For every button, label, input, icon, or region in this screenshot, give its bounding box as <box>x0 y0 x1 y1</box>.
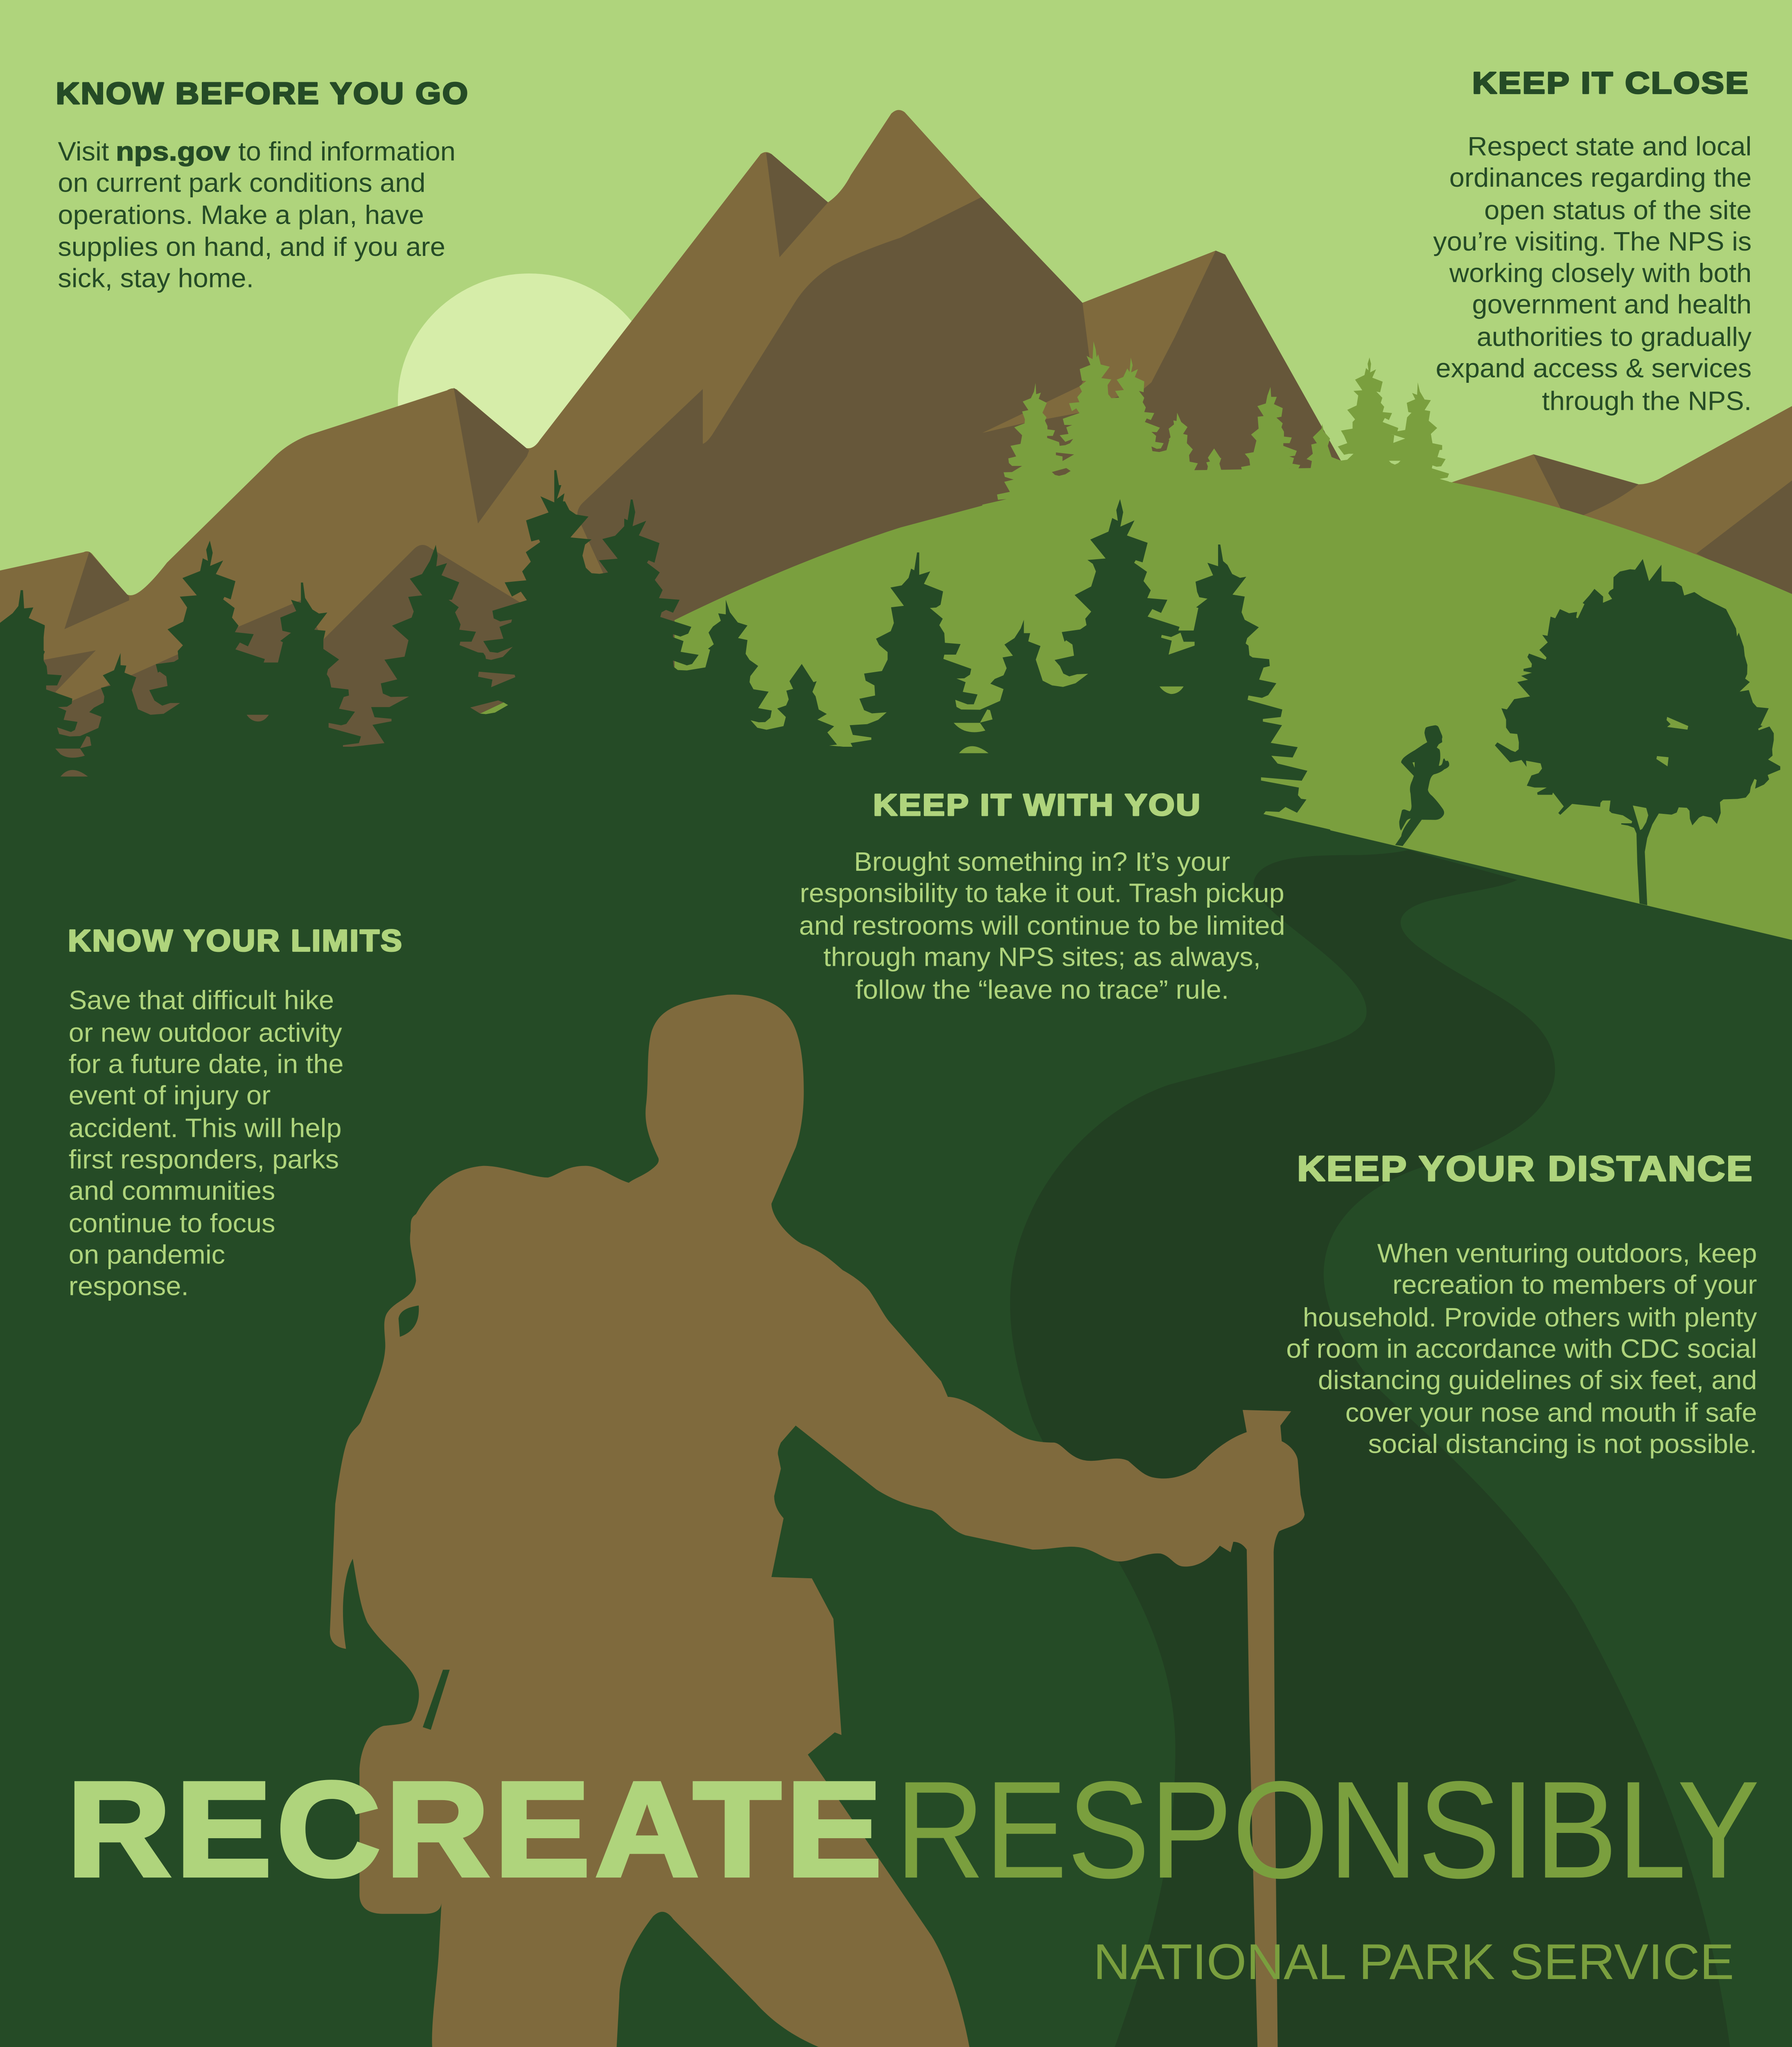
text: know before you go: on current park conditions and <box>58 168 426 198</box>
text: know your limits: event of injury or <box>69 1080 271 1110</box>
text: keep it close: through the NPS. <box>1542 386 1751 416</box>
heading: know your limits: KNOW YOUR LIMITS <box>68 924 403 958</box>
text: know before you go: to find information <box>238 136 456 166</box>
main mountain range <box>0 110 1341 836</box>
text: keep it with you: responsibility to take it out. Trash pickup <box>800 878 1284 908</box>
text: know your limits <box>69 985 344 1301</box>
text: keep your distance: When venturing outdoors, keep <box>1377 1238 1757 1268</box>
text: keep it with you <box>799 847 1285 1004</box>
text: keep it close <box>1433 131 1751 416</box>
text: keep it close: ordinances regarding the <box>1449 163 1751 192</box>
text: know before you go: Visit <box>58 136 109 166</box>
text: keep it close: you’re visiting. The NPS is <box>1433 226 1751 256</box>
text: know before you go: supplies on hand, and if you are <box>58 232 445 262</box>
heading: keep it close: KEEP IT CLOSE <box>1472 66 1749 100</box>
text: know your limits: first responders, parks <box>69 1144 339 1174</box>
text: keep it close: authorities to gradually <box>1477 322 1751 352</box>
hill <box>675 468 1792 966</box>
distant right mountains <box>1446 406 1792 614</box>
text: keep your distance: cover your nose and mouth if safe <box>1345 1398 1757 1427</box>
winding trail <box>1010 850 1730 2047</box>
text: know before you go: operations. Make a plan, have <box>58 200 424 230</box>
heading: know before you go: KNOW BEFORE YOU GO <box>56 77 469 110</box>
text: keep your distance: distancing guidelines of six feet, and <box>1318 1365 1757 1395</box>
text: know your limits: continue to focus <box>69 1208 275 1238</box>
text: know before you go <box>58 136 456 293</box>
heading: keep it with you: KEEP IT WITH YOU <box>873 788 1202 822</box>
text: keep it with you: and restrooms will continue to be limited <box>799 911 1285 940</box>
text: keep it close: Respect state and local <box>1467 131 1751 161</box>
text: keep it with you: through many NPS sites; as always, <box>824 942 1261 972</box>
text: know your limits: Save that difficult hike <box>69 985 334 1015</box>
hilltop trees <box>982 341 1474 516</box>
subtitle: national park service: NATIONAL PARK SERVICE <box>1093 1934 1734 1990</box>
hiker silhouette with trekking pole <box>330 994 1305 2047</box>
text: know your limits: response. <box>69 1271 189 1301</box>
text: keep it with you: follow the “leave no trace” rule. <box>855 974 1229 1004</box>
sun <box>398 273 660 528</box>
text: keep it close: government and health <box>1472 289 1751 319</box>
title: recreate: RECREATE <box>67 1754 887 1904</box>
text: keep your distance: social distancing is not possible. <box>1368 1429 1757 1459</box>
text: keep it close: expand access & services <box>1435 353 1751 383</box>
text: know before you go: sick, stay home. <box>58 263 254 293</box>
text: know your limits: for a future date, in the <box>69 1049 344 1079</box>
heading: keep your distance: KEEP YOUR DISTANCE <box>1297 1149 1754 1188</box>
text: know your limits: or new outdoor activity <box>69 1018 342 1047</box>
text: keep it with you: Brought something in? It’s your <box>854 847 1230 877</box>
text: keep your distance: household. Provide others with plenty <box>1303 1302 1757 1332</box>
text: know your limits: on pandemic <box>69 1240 225 1270</box>
text: keep your distance <box>1286 1238 1757 1459</box>
text: know before you go: nps.gov <box>116 136 230 166</box>
leafy tree <box>1495 559 1780 905</box>
text: keep your distance: of room in accordance with CDC social <box>1286 1333 1757 1363</box>
text: know your limits: and communities <box>69 1175 275 1205</box>
runner silhouette <box>1395 725 1449 846</box>
foreground ground and conifer tree line <box>0 470 1792 2047</box>
text: keep your distance: recreation to members of your <box>1393 1270 1757 1299</box>
text: keep it close: working closely with both <box>1449 258 1751 288</box>
text: know your limits: accident. This will help <box>69 1113 341 1143</box>
text: keep it close: open status of the site <box>1484 195 1751 225</box>
